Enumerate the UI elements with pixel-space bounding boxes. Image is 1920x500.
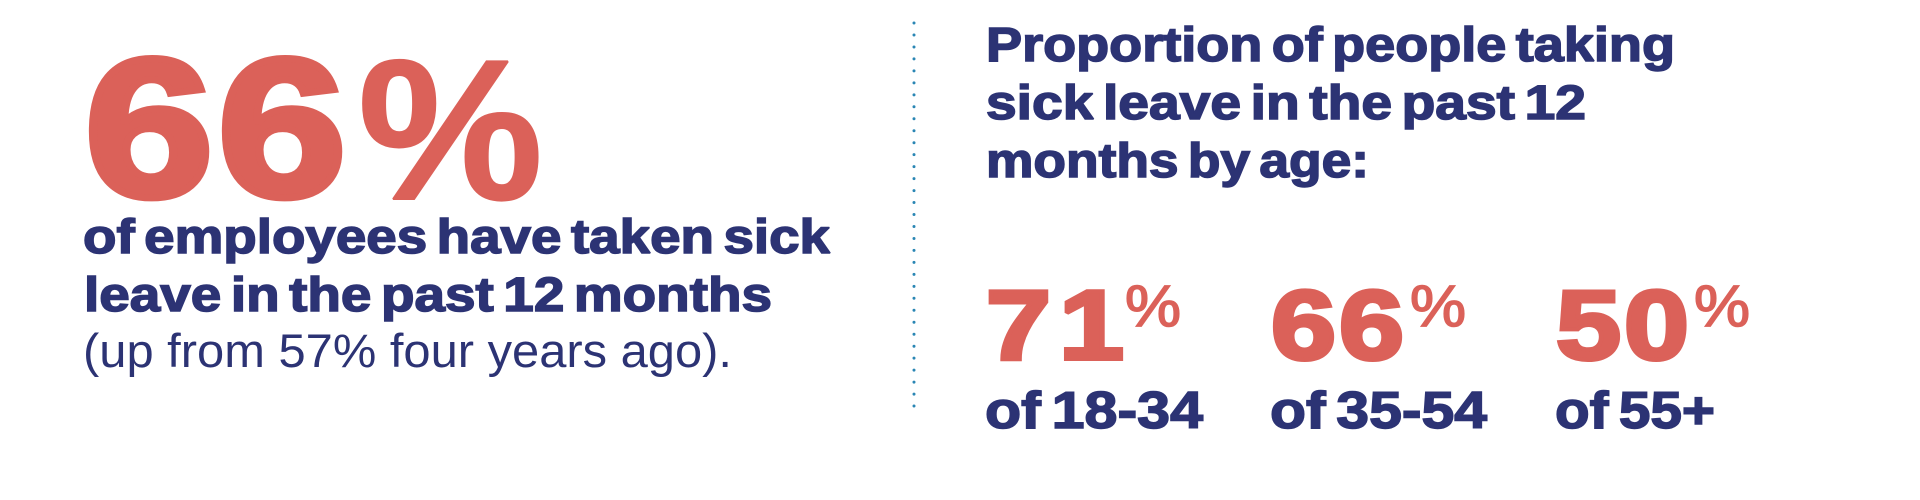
panel: sick leave by age	[985, 19, 1750, 440]
description text: leave in the past 12 months	[84, 269, 772, 322]
big statistic: 66%	[84, 18, 543, 242]
stat: 18-34	[985, 270, 1203, 440]
panel: overall sick leave statistic	[83, 18, 830, 377]
stat: 18-34: %	[1125, 274, 1181, 339]
heading: months by age:	[986, 135, 1369, 188]
stat: 35-54: %	[1410, 274, 1466, 339]
stat: 35-54: of 35-54	[1270, 382, 1487, 440]
stat: 55+: 5	[1556, 270, 1621, 380]
description text: of employees have taken sick	[83, 211, 830, 264]
stat: 18-34: of 18-34	[985, 382, 1203, 440]
stat: 35-54	[1270, 270, 1487, 440]
stat: 55+: %	[1694, 274, 1750, 339]
big statistic: 66%: 6	[84, 18, 214, 238]
stat: 55+: 0	[1624, 270, 1689, 380]
heading: sick leave in the past 12	[986, 77, 1586, 130]
stat: 18-34: 7	[986, 270, 1051, 380]
stat: 35-54: 6	[1339, 270, 1404, 380]
description text	[83, 211, 830, 377]
stat: 55+: of 55+	[1555, 382, 1715, 440]
stat: 18-34: 1	[1059, 270, 1124, 380]
heading: Proportion of people taking	[986, 19, 1675, 72]
heading	[986, 19, 1675, 188]
stat: 55+	[1555, 270, 1750, 440]
description text: (up from 57% four years ago).	[83, 324, 732, 377]
big statistic: 66%: %	[358, 19, 543, 242]
stat: 35-54: 6	[1271, 270, 1336, 380]
dotted divider	[912, 23, 916, 408]
big statistic: 66%: 6	[218, 18, 346, 238]
